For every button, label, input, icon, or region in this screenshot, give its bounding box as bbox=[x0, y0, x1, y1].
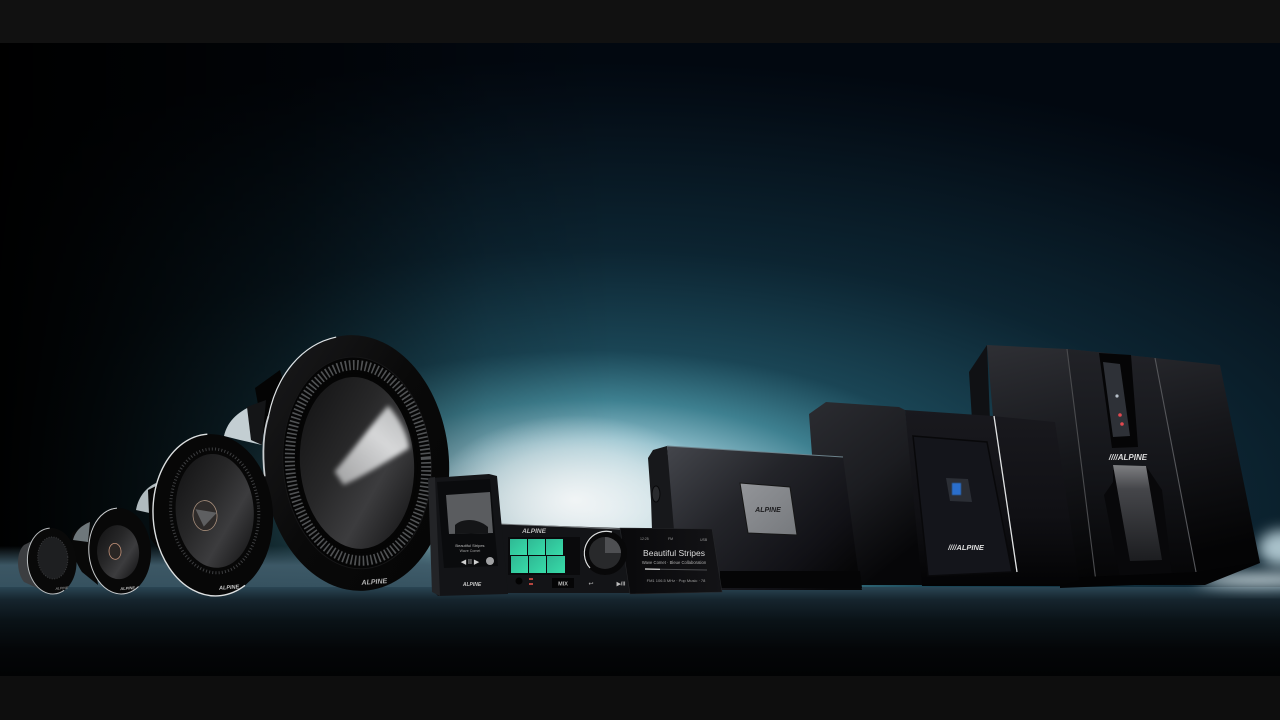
small driver logo: ALPINE bbox=[119, 585, 135, 591]
player logo: ALPINE bbox=[462, 582, 482, 588]
mid driver rim bbox=[147, 430, 279, 600]
speaker: tweeter bbox=[18, 526, 79, 596]
floor bbox=[0, 530, 1280, 676]
amplifier: large tower bbox=[969, 345, 1260, 588]
tweeter grille bbox=[36, 536, 69, 580]
medium amp light line bbox=[994, 416, 1017, 572]
small driver cone bbox=[95, 524, 141, 581]
medium amp logo: ////ALPINE bbox=[947, 543, 985, 552]
detachable display panel bbox=[620, 528, 722, 594]
tower mirror panel bbox=[1104, 465, 1172, 578]
tweeter logo: ALPINE bbox=[54, 586, 69, 591]
medium amp front bbox=[905, 410, 1079, 586]
head unit bbox=[500, 524, 640, 593]
player screen: Wave Comet bbox=[460, 549, 480, 553]
tower base bbox=[1060, 562, 1260, 588]
player screen: ◀ II ▶ bbox=[461, 559, 480, 566]
speaker: large subwoofer bbox=[224, 329, 458, 597]
head unit logo: ALPINE bbox=[521, 528, 547, 535]
small driver rim bbox=[86, 506, 154, 596]
mid driver cone bbox=[166, 446, 263, 576]
tower centre panel bbox=[1067, 349, 1197, 582]
detachable display panel: Beautiful Stripes bbox=[643, 548, 705, 558]
top letterbox band bbox=[0, 0, 1280, 43]
portable music player bbox=[428, 474, 508, 596]
subwoofer logo: ALPINE bbox=[360, 578, 388, 587]
small amp top face bbox=[667, 446, 862, 590]
mid driver dust cap bbox=[192, 500, 218, 531]
small amp silver plate bbox=[740, 483, 797, 535]
detachable display panel: FM1 106.5 MHz · Pop Music · 78 bbox=[647, 578, 706, 583]
medium amp side bbox=[809, 402, 925, 585]
speaker: small driver bbox=[71, 506, 154, 596]
amplifier: small bbox=[648, 446, 862, 590]
detachable display panel: Wave Comet · Bleue Collaboration bbox=[642, 560, 707, 565]
amplifier: medium bbox=[809, 402, 1079, 586]
mid driver logo: ALPINE bbox=[218, 584, 240, 592]
head unit buttons: ↩ bbox=[588, 582, 594, 588]
medium amp inner panel bbox=[913, 436, 1012, 576]
tower top-left side bbox=[969, 345, 990, 420]
medium amp blue display bbox=[946, 478, 972, 502]
tower body bbox=[987, 345, 1260, 585]
head unit buttons: ▶/II bbox=[616, 580, 626, 588]
detachable display panel: FM bbox=[668, 537, 673, 541]
tweeter ring bbox=[25, 526, 79, 596]
tower display bbox=[1099, 353, 1138, 448]
head unit green screen bbox=[508, 537, 580, 575]
detachable display panel: USB bbox=[700, 538, 708, 542]
subwoofer rear basket bbox=[224, 370, 300, 470]
small amp silver plate: ALPINE bbox=[754, 507, 781, 514]
detachable display panel: 12:25 bbox=[640, 537, 649, 541]
tower logo: ////ALPINE bbox=[1108, 453, 1148, 462]
subwoofer outer rim bbox=[254, 329, 458, 597]
head unit buttons: MIX bbox=[558, 582, 568, 588]
player screen: Beautiful Stripes bbox=[455, 543, 485, 548]
subwoofer carbon cone bbox=[291, 369, 423, 557]
speaker: mid driver bbox=[136, 430, 279, 600]
bottom letterbox band bbox=[0, 676, 1280, 720]
head unit volume knob bbox=[583, 531, 627, 575]
subwoofer ribbed surround bbox=[276, 352, 438, 574]
head unit buttons bbox=[516, 578, 626, 588]
small amp side bbox=[648, 446, 676, 530]
small driver dust cap bbox=[108, 543, 122, 560]
tower red indicators bbox=[1118, 413, 1122, 417]
player screen bbox=[437, 479, 498, 568]
